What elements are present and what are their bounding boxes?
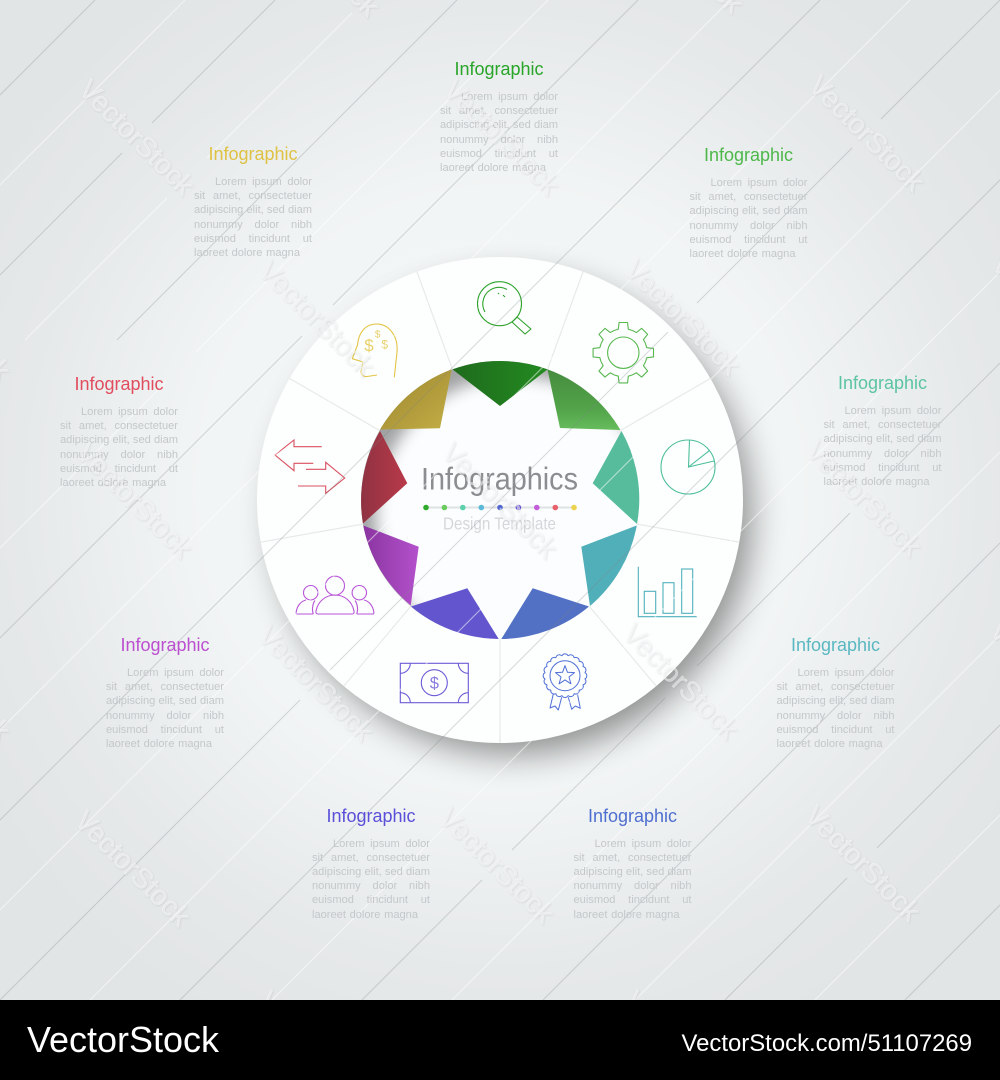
text block: indigo: euismod tincidunt ut [312,894,430,906]
text block: olive: nonummy dolor nibh [194,219,312,231]
centre subtitle: Design Template [443,514,556,534]
text block: cyan [776,635,894,750]
text block: teal: laoreet dolore magna [824,476,930,488]
watermark layer: VectorStock [433,802,561,930]
text block: blue: Infographic [588,806,677,826]
ring panel [257,257,743,743]
text block: blue: nonummy dolor nibh [574,880,692,892]
icon: medal [543,654,587,710]
segment: blue [501,588,589,639]
text block: red: sit amet, consectetuer [60,420,178,432]
text block: top green: sit amet, consectetuer [440,105,558,117]
text block: red: Lorem ipsum dolor [81,406,178,418]
watermark layer: VectorStock [73,74,201,202]
text block: teal: Lorem ipsum dolor [844,405,942,417]
text block: purple: adipiscing elit, sed diam [106,695,224,707]
text block: blue: Lorem ipsum dolor [594,838,692,850]
text block: light green: Lorem ipsum dolor [710,177,808,189]
text block: teal: sit amet, consectetuer [824,419,942,431]
text block: teal [824,373,942,488]
centre star with inner shadow [361,361,621,626]
text block: top green [440,59,558,174]
text block: cyan: Infographic [791,635,880,655]
text block: indigo [312,806,430,921]
text block: light green: Infographic [704,145,793,165]
text block: purple: euismod tincidunt ut [106,724,224,736]
footer brand: VectorStock [27,1019,220,1060]
text block: indigo: nonummy dolor nibh [312,880,430,892]
watermark layer: VectorStock [438,74,566,202]
text block: top green: Lorem ipsum dolor [461,91,558,103]
text block: indigo: laoreet dolore magna [312,909,418,921]
watermark layer: VectorStock [799,800,927,928]
text block: light green: adipiscing elit, sed diam [690,205,808,217]
segment: red [361,431,407,524]
text block: red: euismod tincidunt ut [60,463,178,475]
icon: gear [593,322,654,383]
text block: teal: Infographic [838,373,927,393]
text block: light green [690,145,808,260]
icon: head with dollars: $ [375,330,381,340]
text block: red: laoreet dolore magna [60,477,166,489]
timeline dots [423,505,577,510]
text block: cyan: laoreet dolore magna [776,738,882,750]
text block: top green: adipiscing elit, sed diam [440,119,558,131]
watermark layer: VectorStock [619,254,747,382]
icon: banknote [400,663,468,703]
icon: head with dollars: $ [364,336,374,355]
text block: top green: Infographic [454,59,544,79]
icon: people [296,576,374,614]
text block: red: adipiscing elit, sed diam [60,434,178,446]
text block: cyan: adipiscing elit, sed diam [776,695,894,707]
text block: olive: laoreet dolore magna [194,247,300,259]
icon: exchange arrows [275,440,345,493]
text block: olive: sit amet, consectetuer [194,190,312,202]
text block: cyan: euismod tincidunt ut [776,724,894,736]
text block: purple: laoreet dolore magna [106,738,212,750]
text block: olive: Lorem ipsum dolor [215,176,312,188]
text block: blue: sit amet, consectetuer [574,852,692,864]
text block: cyan: Lorem ipsum dolor [798,667,894,679]
watermark layer: VectorStock [800,435,928,563]
text block: blue: laoreet dolore magna [574,909,680,921]
text block: cyan: sit amet, consectetuer [776,681,894,693]
icon: head with dollars: $ [381,338,388,352]
text block: blue: euismod tincidunt ut [574,894,692,906]
text block: light green: euismod tincidunt ut [690,234,808,246]
segment dividers [261,272,739,743]
icon: magnifier [478,282,531,334]
text block: light green: laoreet dolore magna [690,248,796,260]
watermark layer: VectorStock [617,618,745,746]
text block: purple: sit amet, consectetuer [106,681,224,693]
segment: purple [363,526,419,606]
text block: red [60,374,178,489]
segment: light green [548,369,620,430]
text block: olive [194,144,312,259]
footer bar [0,1000,972,1060]
text block: purple: nonummy dolor nibh [106,710,224,722]
text block: red: Infographic [74,374,164,394]
watermark layer: VectorStock [803,70,931,198]
watermark layer: VectorStock [252,620,380,748]
segment: indigo [411,588,499,639]
icon: pie chart [661,440,715,494]
text block: purple: Infographic [120,635,210,655]
segment: cyan [581,526,637,606]
text block: top green: laoreet dolore magna [440,162,546,174]
footer image id: VectorStock.com/51107269 [682,1030,972,1057]
text block: olive: Infographic [208,144,298,164]
text block: indigo: adipiscing elit, sed diam [312,866,430,878]
segment: teal [593,431,639,524]
text block: purple: Lorem ipsum dolor [127,667,224,679]
watermark layer: VectorStock [436,437,564,565]
watermark layer: VectorStock [71,437,199,565]
text block: olive: adipiscing elit, sed diam [194,204,312,216]
text block: purple [106,635,224,750]
text block: red: nonummy dolor nibh [60,449,178,461]
text block: teal: adipiscing elit, sed diam [824,433,942,445]
text block: indigo: Infographic [326,806,416,826]
text block: light green: nonummy dolor nibh [690,220,808,232]
watermark layer: VectorStock [253,255,381,383]
segment: dark green [452,361,548,406]
text block: blue [574,806,692,921]
centre title: Infographics [421,460,578,496]
colored star segments [361,361,639,639]
icon: bar chart [638,567,697,617]
text block: cyan: nonummy dolor nibh [776,710,894,722]
icon: head with dollars [352,324,397,377]
ring drop shadow [275,278,751,754]
text block: top green: euismod tincidunt ut [440,148,558,160]
text block: light green: sit amet, consectetuer [690,191,808,203]
text block: blue: adipiscing elit, sed diam [574,866,692,878]
text block: top green: nonummy dolor nibh [440,134,558,146]
segment: olive [380,369,452,430]
text block: teal: nonummy dolor nibh [824,448,942,460]
icon: banknote: $ [430,675,439,693]
text block: olive: euismod tincidunt ut [194,233,312,245]
text block: indigo: Lorem ipsum dolor [333,838,430,850]
watermark layer: VectorStock [69,805,197,933]
text block: teal: euismod tincidunt ut [824,462,942,474]
text block: indigo: sit amet, consectetuer [312,852,430,864]
